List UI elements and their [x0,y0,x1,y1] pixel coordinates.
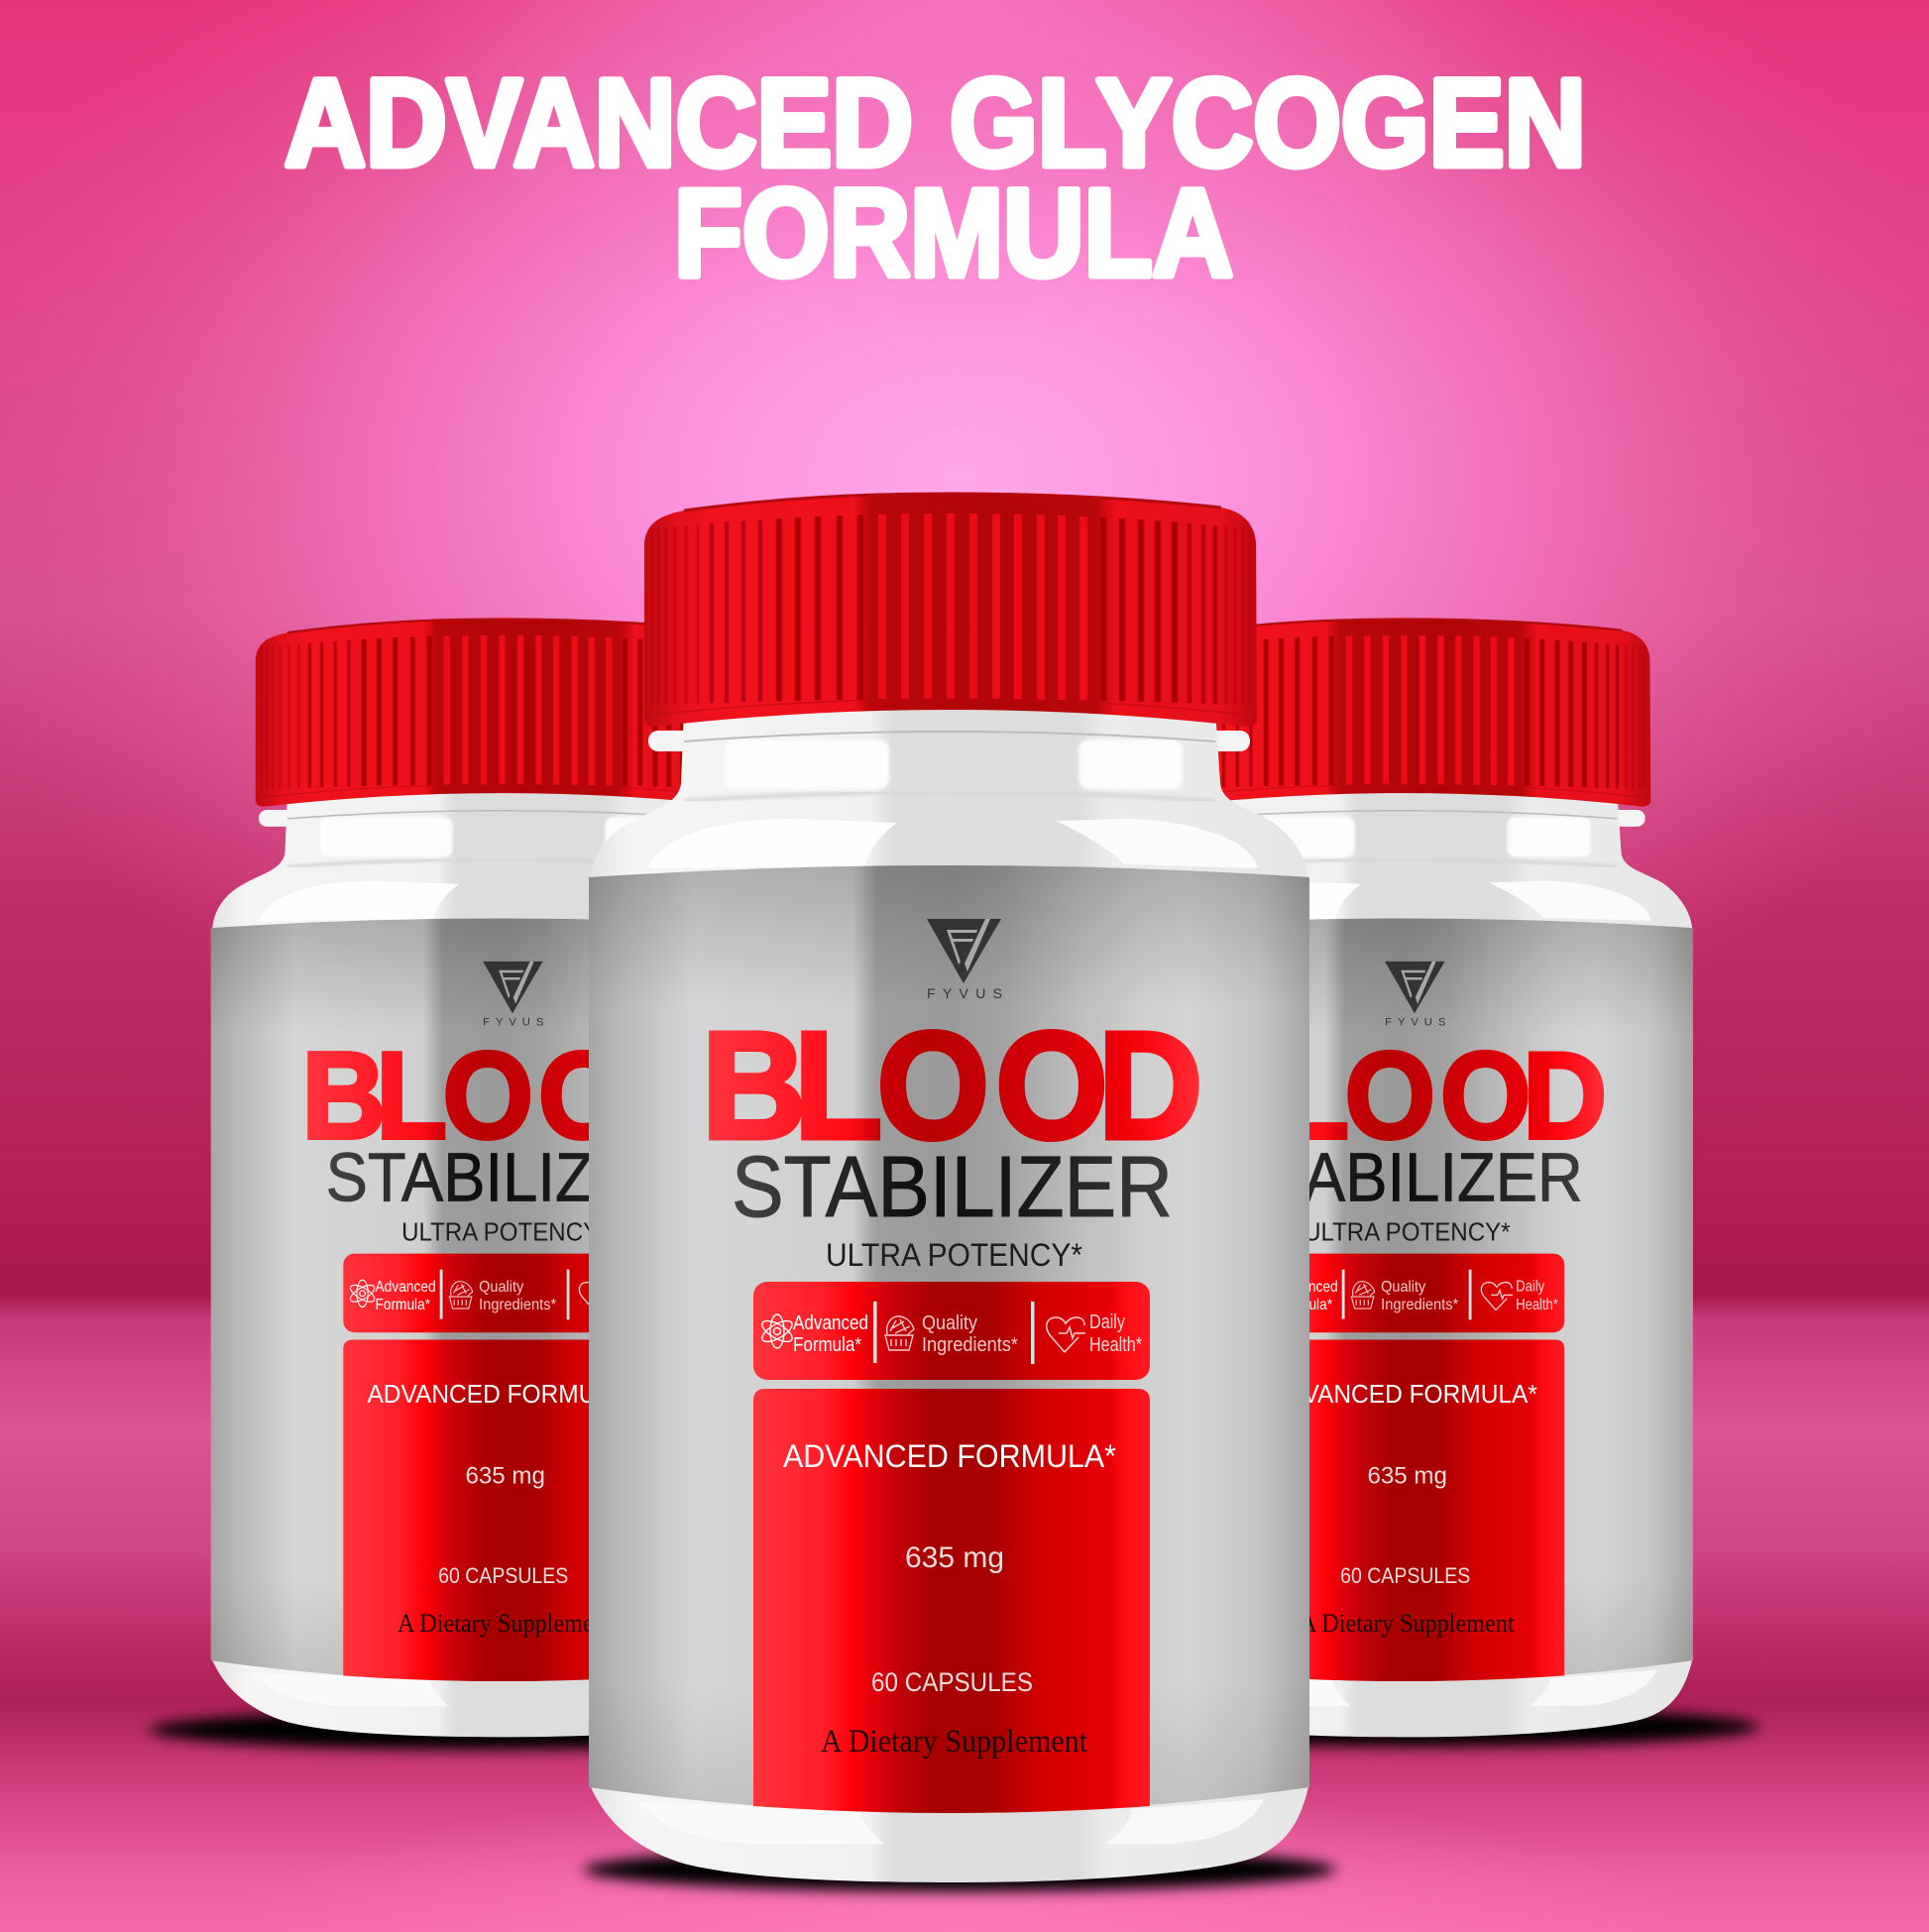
capsule count: 60 CAPSULES [871,1667,1033,1697]
bottle: right: BLOOD [1203,1027,1607,1164]
feature: health: Health* [1089,1334,1142,1356]
bottle: left: STABILIZER [326,1138,681,1215]
subtitle: ULTRA POTENCY* [826,1237,1082,1273]
bottle: left: A Dietary Supplement [397,1608,613,1638]
bottle: left: Health* [614,1296,656,1313]
bottle artwork: cap, body, label, panels, icons [589,494,1309,1882]
product name: stabilizer: STABILIZER [732,1139,1173,1235]
bottle: right: Daily [1516,1277,1545,1295]
feature: daily: Daily [1089,1311,1125,1333]
title word: advanced: ADVANCED [284,55,913,192]
bottle: right [1113,620,1693,1737]
bottle: left: FYVUS [483,1016,543,1028]
bottle: right: ADVANCED FORMULA* [1269,1381,1537,1409]
bottle: left: 60 CAPSULES [438,1563,568,1588]
bottle: right: STABILIZER [1228,1138,1583,1215]
bottle: right: 635 mg [1367,1462,1447,1489]
bottle: right: Ingredients* [1381,1296,1459,1313]
bottle: right: 60 CAPSULES [1340,1563,1470,1588]
dosage: 635 mg [905,1541,1004,1574]
bottle: right: Quality [1381,1278,1426,1296]
bottle: left: Quality [479,1278,524,1296]
bottle: left: Daily [614,1277,643,1295]
supplement note: A Dietary Supplement [821,1724,1087,1760]
bottle: right: Advanced [1278,1278,1338,1296]
bottle: right: Health* [1516,1296,1558,1313]
title word: glycogen: GLYCOGEN [950,55,1586,192]
panel heading: ADVANCED FORMULA* [783,1438,1116,1474]
bottle: left: ADVANCED FORMULA* [367,1381,635,1409]
bottle: right: A Dietary Supplement [1300,1608,1515,1638]
title [284,55,1586,302]
bottle: left: Formula* [376,1296,431,1313]
bottle: left: Ingredients* [479,1296,557,1313]
bottle: left: Advanced [376,1278,436,1296]
feature: formula line: Formula* [793,1334,861,1356]
bottle: right: Formula* [1278,1296,1333,1313]
bottle: left [211,620,791,1737]
bottle: right: FYVUS [1385,1016,1445,1028]
bottle: right: ULTRA POTENCY* [1304,1219,1511,1247]
bottle: left: 635 mg [465,1462,545,1489]
bottle: left: ULTRA POTENCY* [401,1219,609,1247]
feature: quality: Quality [922,1312,977,1334]
product name: blood: BLOOD [702,1000,1202,1171]
brand name: FYVUS [927,985,1002,1001]
shadow: right bottle [1095,1707,1759,1747]
title line two: formula: FORMULA [674,165,1233,302]
shadow: left bottle [149,1710,823,1750]
bottle: centre [589,494,1309,1882]
bottle: left: BLOOD [301,1027,705,1164]
shadow: centre bottle [583,1848,1336,1891]
feature: ingredients: Ingredients* [922,1334,1018,1356]
feature: advanced formula: Advanced [793,1312,868,1334]
